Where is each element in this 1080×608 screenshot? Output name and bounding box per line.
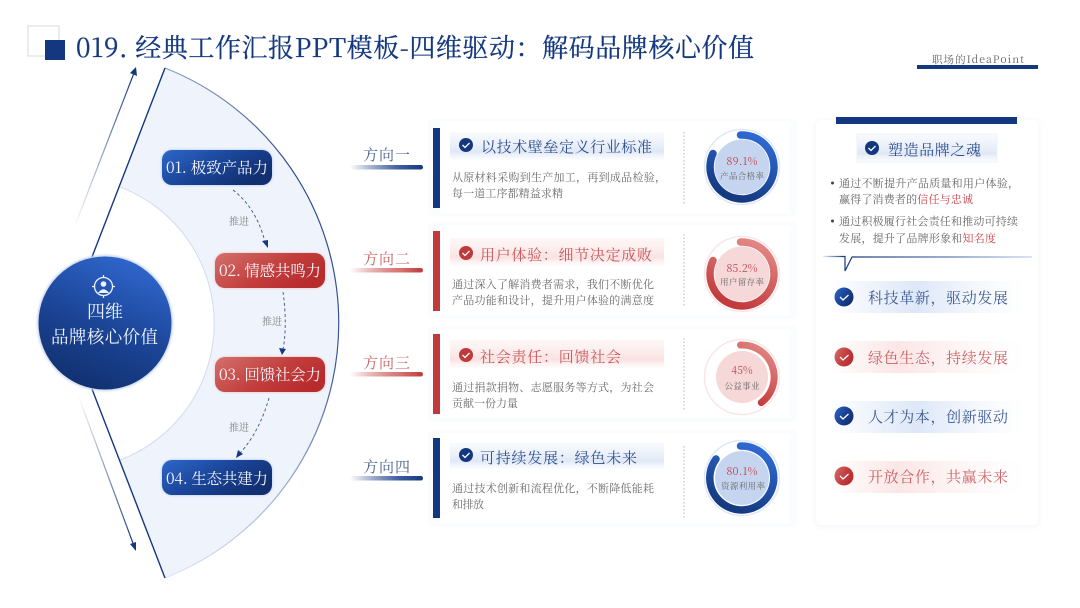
donut chart: 80.1%: [704, 440, 780, 516]
fan inner arc: [120, 187, 214, 460]
pill 03: [214, 356, 326, 392]
bullet text 1: 赢得了消费者的信任与忠诚: [839, 191, 973, 207]
card 3 heading: 社会责任：回馈社会: [480, 346, 621, 367]
title: 019. 经典工作汇报PPT模板-四维驱动：解码品牌核心价值: [76, 28, 754, 65]
dashed arrow 1 to 2: 推进: [229, 213, 249, 228]
dashed arrow 2 to 3: 推进: [262, 313, 282, 328]
bullet text 2: [831, 213, 1018, 246]
title decoration: outline square: [28, 26, 59, 56]
dashed arrow 1 to 2: [229, 190, 268, 248]
donut chart: 89.1%: [704, 130, 780, 204]
donut chart: 45%: [704, 340, 780, 414]
lower edge line: [92, 389, 165, 578]
card 3 body text: 通过捐款捐物、志愿服务等方式，为社会: [452, 380, 654, 394]
donut chart: 80.1%: 资源利用率: [721, 480, 765, 492]
card 2 heading: 用户体验：细节决定成败: [480, 244, 652, 265]
direction label 2: [350, 248, 423, 272]
fan shape: [120, 68, 339, 578]
pill 04: [162, 460, 272, 496]
direction label 3: [350, 352, 423, 376]
bullet text 2: 发展，提升了品牌形象和知名度: [839, 230, 996, 246]
dashed arrow 3 to 4: [229, 398, 269, 458]
donut chart: 45%: 45%: [731, 363, 753, 378]
card 4 body text: [452, 481, 654, 511]
direction label 3: 方向三: [363, 352, 410, 373]
dashed arrow 2 to 3: [262, 292, 286, 355]
card 1 heading: 以技术壁垒定义行业标准: [481, 136, 652, 157]
row: 科技革新: [830, 281, 1025, 313]
central text: 品牌核心价值: [51, 324, 158, 349]
card 4 heading: [450, 443, 664, 469]
card 1 body text: 从原材料采购到生产加工，再到成品检验，: [452, 170, 666, 184]
direction label 1: [350, 144, 423, 170]
row: 绿色生态: 绿色生态，持续发展: [868, 347, 1008, 368]
row: 绿色生态: [830, 341, 1025, 373]
fan diagram: [37, 67, 339, 578]
card 2 body text: 通过深入了解消费者需求，我们不断优化: [452, 277, 654, 291]
arrow: lower outward: [78, 395, 136, 551]
card 3 body text: 贡献一份力量: [452, 396, 518, 410]
pill 01: 01. 极致产品力: [166, 156, 268, 178]
donut chart: 85.2%: 用户留存率: [720, 276, 764, 288]
card 1 body text: 每一道工序都精益求精: [452, 186, 563, 200]
title decoration: solid square: [45, 40, 65, 60]
central circle: [37, 255, 173, 391]
panel: brand soul: [815, 117, 1039, 527]
panel heading: 塑造品牌之魂: [888, 139, 981, 160]
pill 04: 04. 生态共建力: [166, 467, 268, 489]
card 4 heading: 可持续发展：绿色未来: [480, 447, 637, 468]
panel: card 1: [428, 119, 797, 216]
row: 开放合作: 开放合作，共赢未来: [868, 466, 1008, 487]
card 1 heading: [450, 132, 664, 160]
row: 人才为本: [830, 401, 1025, 433]
direction label 2: 方向二: [363, 248, 410, 269]
card 2 body text: [452, 277, 654, 307]
donut chart: 85.2%: [704, 236, 780, 312]
pill 03: 03. 回馈社会力: [219, 363, 321, 385]
brand tag: [917, 52, 1038, 69]
donut chart: 80.1%: 80.1%: [726, 464, 758, 479]
central text: [51, 298, 158, 349]
card 3 body text: [452, 380, 654, 410]
bullet text 1: [831, 175, 1019, 207]
bullet text 2: 通过积极履行社会责任和推动可持续: [839, 213, 1018, 229]
row: 科技革新: 科技革新，驱动发展: [868, 287, 1008, 308]
panel: card 2: [428, 222, 797, 319]
central text: 四维: [87, 298, 123, 324]
donut chart: 85.2%: 85.2%: [726, 261, 758, 276]
donut chart: 89.1%: 产品合格率: [720, 170, 764, 182]
row: 人才为本: 人才为本，创新驱动: [868, 406, 1008, 427]
fan outer arc: [165, 68, 339, 578]
panel: card 4: [428, 430, 797, 527]
card 4 body text: 和排放: [452, 497, 484, 511]
direction label 4: 方向四: [363, 456, 410, 477]
arrow: upper outward: [74, 67, 137, 228]
donut chart: 45%: 公益事业: [724, 380, 760, 392]
upper edge line: [92, 68, 165, 257]
card 1 body text: [452, 170, 666, 200]
card 3 heading: [450, 340, 664, 368]
icon: target person: [92, 275, 115, 298]
direction label 4: [350, 456, 423, 480]
speech divider: [823, 256, 1032, 271]
pill 02: 02. 情感共鸣力: [219, 259, 321, 281]
card 2 body text: 产品功能和设计，提升用户体验的满意度: [452, 293, 654, 307]
direction label 1: 方向一: [363, 144, 410, 165]
donut chart: 89.1%: 89.1%: [726, 154, 758, 169]
panel heading: [857, 134, 997, 162]
card 4 body text: 通过技术创新和流程优化，不断降低能耗: [452, 481, 654, 495]
brand tag: 职场的IdeaPoint: [932, 52, 1024, 67]
pill 02: [214, 252, 326, 288]
bullet text 1: 通过不断提升产品质量和用户体验，: [839, 175, 1019, 191]
row: 开放合作: [830, 461, 1025, 493]
dashed arrow 3 to 4: 推进: [229, 419, 249, 434]
pill 01: [162, 150, 272, 186]
panel: card 3: [428, 326, 797, 422]
card 2 heading: [450, 238, 664, 266]
